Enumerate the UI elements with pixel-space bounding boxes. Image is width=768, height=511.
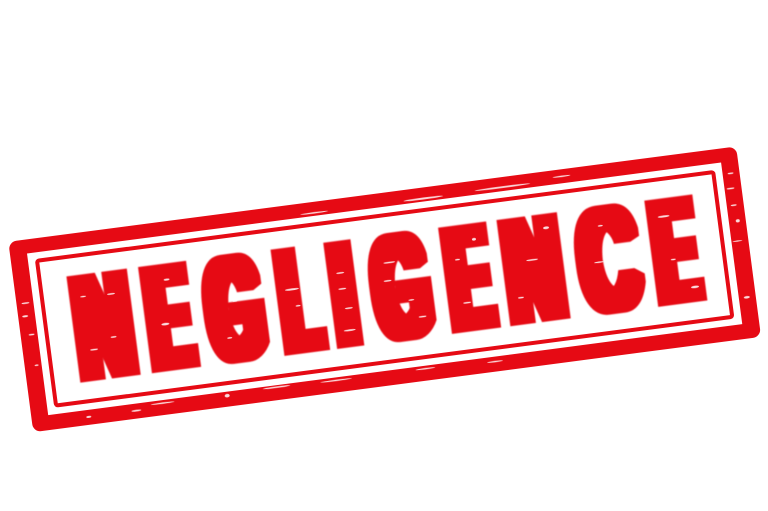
stamp word: N [496, 187, 571, 353]
inner border [37, 172, 732, 406]
distress speckles [13, 153, 754, 425]
stamp word: C [570, 176, 647, 343]
stamp word: G [198, 225, 272, 391]
outer border [8, 146, 761, 432]
rubber stamp [8, 146, 761, 432]
stamp word: I [322, 213, 365, 375]
stamp word: L [271, 218, 328, 383]
stamp word: E [439, 196, 499, 361]
stamp word: E [645, 169, 705, 333]
stamp word: G [364, 203, 438, 370]
stamp word: E [139, 235, 199, 400]
stamp word: N [66, 244, 141, 409]
stamp word [66, 168, 705, 409]
